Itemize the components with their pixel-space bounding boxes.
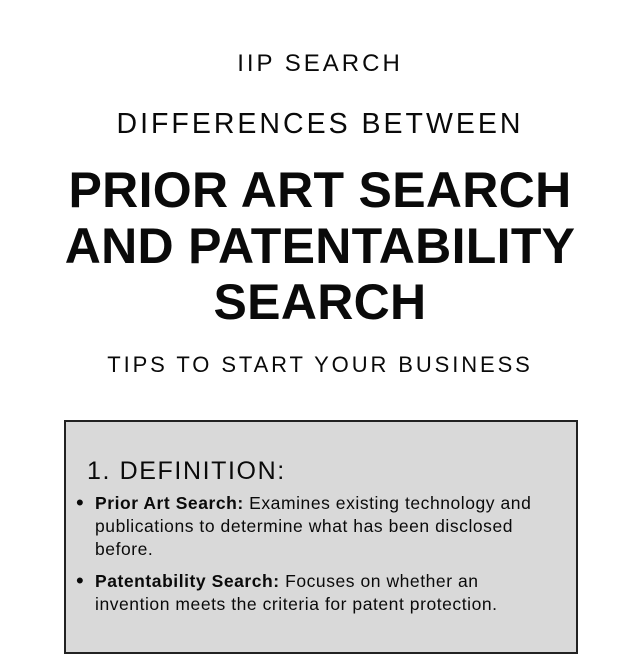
panel: definition [64, 420, 578, 654]
title: PRIOR ART SEARCH [69, 162, 571, 218]
bullet: prior art search: before. [95, 539, 153, 559]
bullet: patentability search [76, 568, 498, 614]
bullet: patentability search: Patentability Search: Focuses on whether an [95, 571, 479, 591]
subtitle: TIPS TO START YOUR BUSINESS [107, 352, 533, 377]
bullet: prior art search: • [76, 490, 84, 515]
bullet: patentability search: • [76, 568, 84, 593]
heading: differences between: DIFFERENCES BETWEEN [117, 108, 523, 140]
bullet list [76, 490, 531, 614]
bullet: patentability search: invention meets the criteria for patent protection. [95, 594, 498, 614]
title: AND PATENTABILITY [65, 218, 575, 274]
bullet: prior art search [76, 490, 531, 559]
title [65, 162, 575, 330]
bullet: prior art search: publications to determine what has been disclosed [95, 516, 513, 536]
bullet: prior art search: Prior Art Search: Examines existing technology and [95, 493, 531, 513]
panel heading: 1. DEFINITION: [87, 457, 286, 485]
title: SEARCH [214, 274, 426, 330]
heading: IIP SEARCH: IIP SEARCH [237, 50, 403, 77]
